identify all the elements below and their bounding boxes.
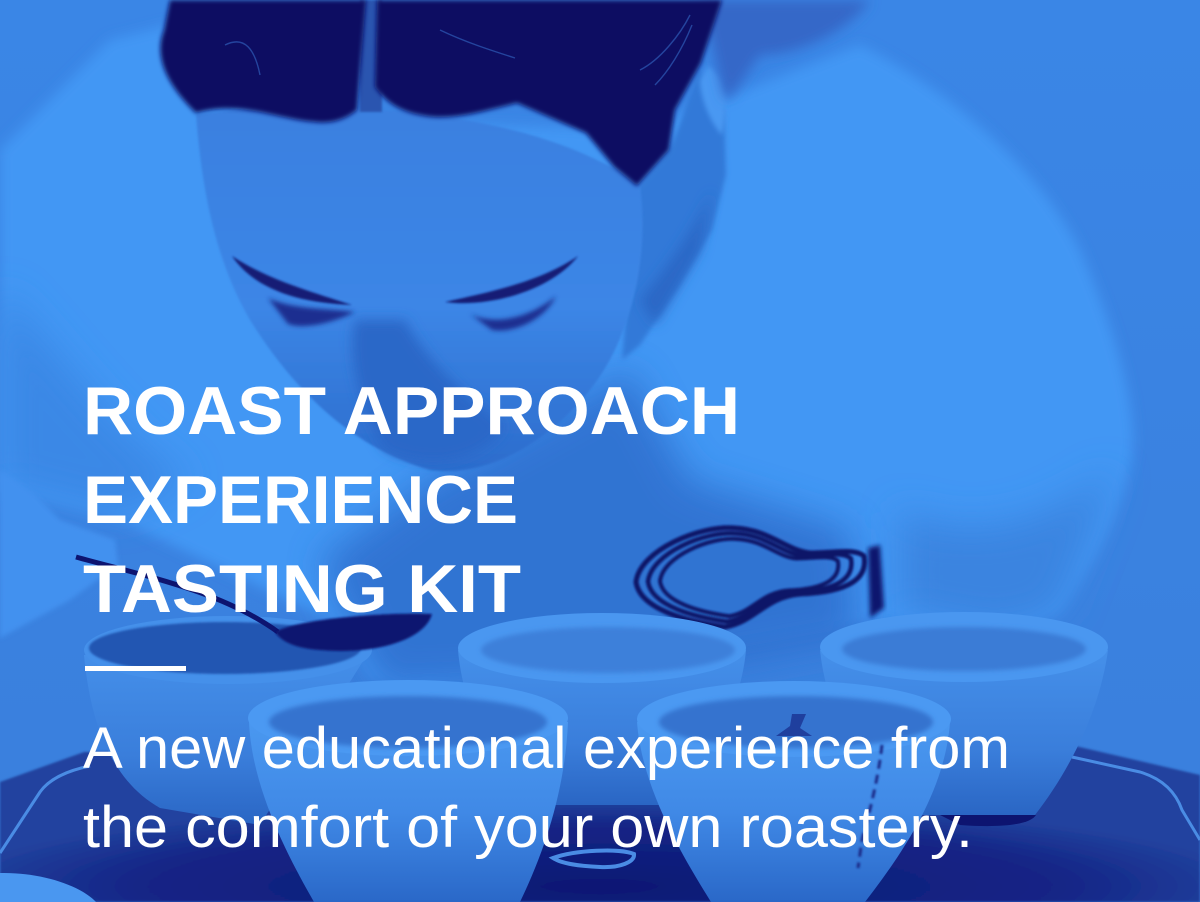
photo: taster in t-shirt [0,0,1133,690]
subtitle: the comfort of your own roastery. [83,795,973,860]
hair left [160,0,366,122]
shirt lower shadow [320,370,860,690]
right eyebrow [445,256,578,303]
neck [622,70,726,360]
out-of-focus hair, right [700,0,870,100]
tray logo [553,851,634,867]
left eyebrow [232,256,352,305]
spoon [76,557,432,651]
title: TASTING KIT [83,551,521,627]
nose and mouth shadow [352,320,505,461]
t-shirt [0,25,1133,690]
hand [0,470,118,638]
hair strands [225,15,692,85]
face [196,107,643,471]
subtitle [83,716,1010,860]
shirt left shadow [0,290,190,515]
hair parting [360,0,382,112]
shirt shadow strip beside logo [868,545,884,618]
shirt logo [636,528,865,627]
cup: front right [637,681,951,902]
cup: back centre [458,613,746,805]
hair right of parting [375,0,722,186]
title: ROAST APPROACH [83,373,740,449]
title [83,373,740,627]
drip streak on cup [858,745,882,868]
left eye [268,298,355,326]
ear [700,66,726,135]
right eye [470,296,556,331]
title: EXPERIENCE [83,462,518,538]
subtitle: A new educational experience from [83,716,1010,781]
tray edge highlight [0,757,1200,853]
dark tray [0,745,1200,902]
cup: back left [84,616,372,825]
cup: back right [820,612,1108,826]
cup: front left [248,680,568,902]
saucer, lower left [0,873,96,902]
shirt right fold shadow [900,470,1115,630]
neck shadow [640,190,712,325]
divider rule [85,666,186,671]
coffee stain in cup [776,714,812,736]
